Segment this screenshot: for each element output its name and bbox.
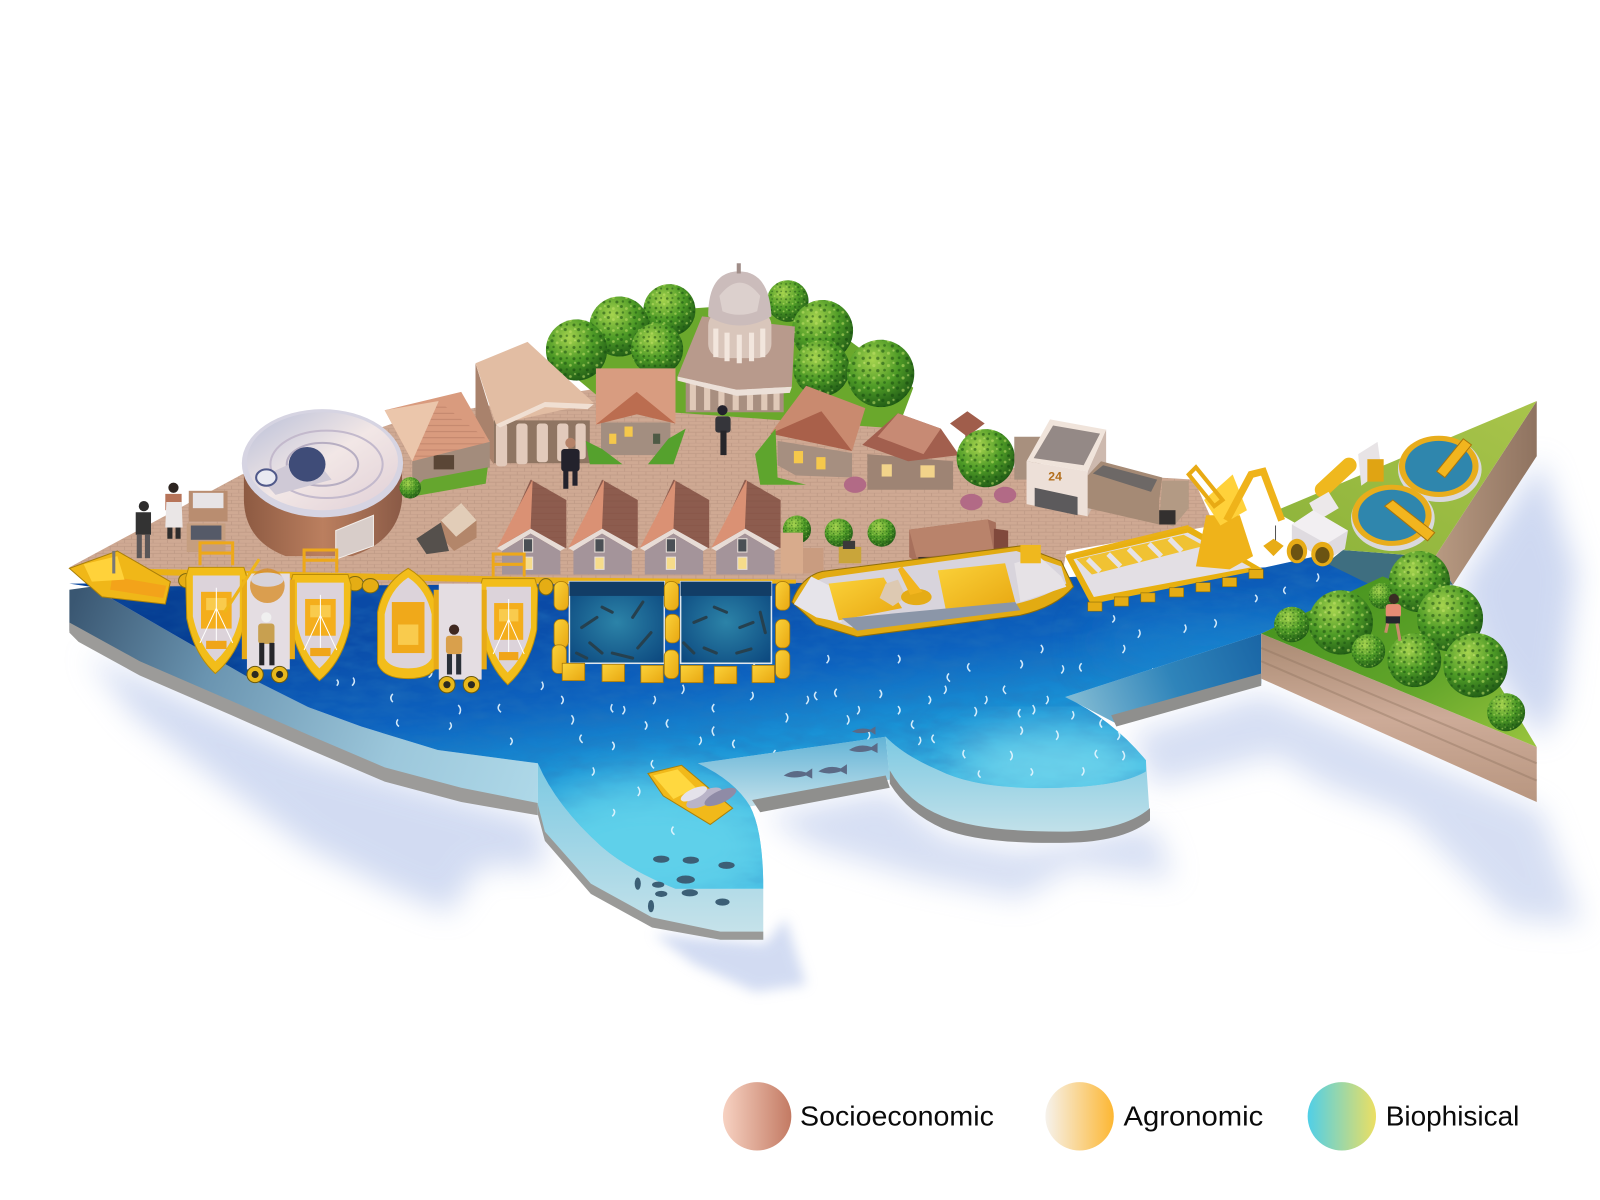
shop open 24 hours [1014,419,1189,527]
quay edge [69,567,796,584]
legend: biophisical: Biophisical [1386,1101,1519,1132]
workers and fish crates [136,483,228,558]
yellow port crane [1189,467,1284,569]
house centre [586,368,686,464]
pectoral fin glass side [538,763,763,940]
house right of capitol [755,386,865,485]
temple with columns [476,342,594,466]
legend: agronomic: Agronomic [1123,1101,1264,1132]
pier with stripes [1065,527,1263,611]
glass wall behind pectoral fin [698,737,890,812]
fish under ventral fin wall [784,727,878,779]
tail upper lobe [1274,401,1537,586]
patio umbrella and tree [950,411,1015,487]
small boat with tuna [648,765,739,824]
ventral fin glass side [886,737,1150,843]
large truck [909,519,1008,563]
pump block and yellow pipe [1309,442,1384,520]
school of fish in pectoral fin [635,856,735,912]
house far right [862,413,959,490]
shrubs [399,477,896,547]
small delivery truck [416,503,477,554]
row of gabled warehouses [497,480,781,574]
tail lower lobe [1261,634,1537,802]
docks with workers [224,559,487,693]
pavement [69,388,1214,587]
glass side: fish belly left [69,587,538,815]
pen floats [552,582,790,684]
cafe tables [844,477,1016,510]
legend: socioeconomic: Socioeconomic [800,1101,994,1132]
settling tank lower [1351,485,1435,551]
legend: socioeconomic [723,1082,994,1151]
fish in pens [577,602,765,658]
house left [385,392,490,498]
fish pens [552,582,790,684]
cargo boxes and forklift [781,533,861,573]
quay bumpers [179,573,553,595]
glass wall behind ventral fin [1065,634,1261,727]
businessmen [561,405,731,489]
capitol [678,263,795,412]
fishing boats [186,543,538,685]
small yellow boat [69,551,170,604]
shop open 24 hours: 24 [1048,470,1062,484]
ground shadow under the fish [87,459,1582,992]
cargo ship [792,545,1073,637]
outflow block and pipes [1287,510,1348,566]
can factory [242,409,403,559]
legend: biophisical [1308,1082,1519,1151]
grass of tail lower lobe [1261,577,1537,747]
settling tank upper [1398,436,1482,502]
water surface [70,557,1368,889]
trees and jogger on tail [1274,551,1525,731]
trees behind capitol [546,280,914,407]
legend: agronomic [1045,1082,1264,1151]
hill grass [551,301,913,429]
legend [723,1082,1519,1151]
panel: fish island [61,263,1537,940]
